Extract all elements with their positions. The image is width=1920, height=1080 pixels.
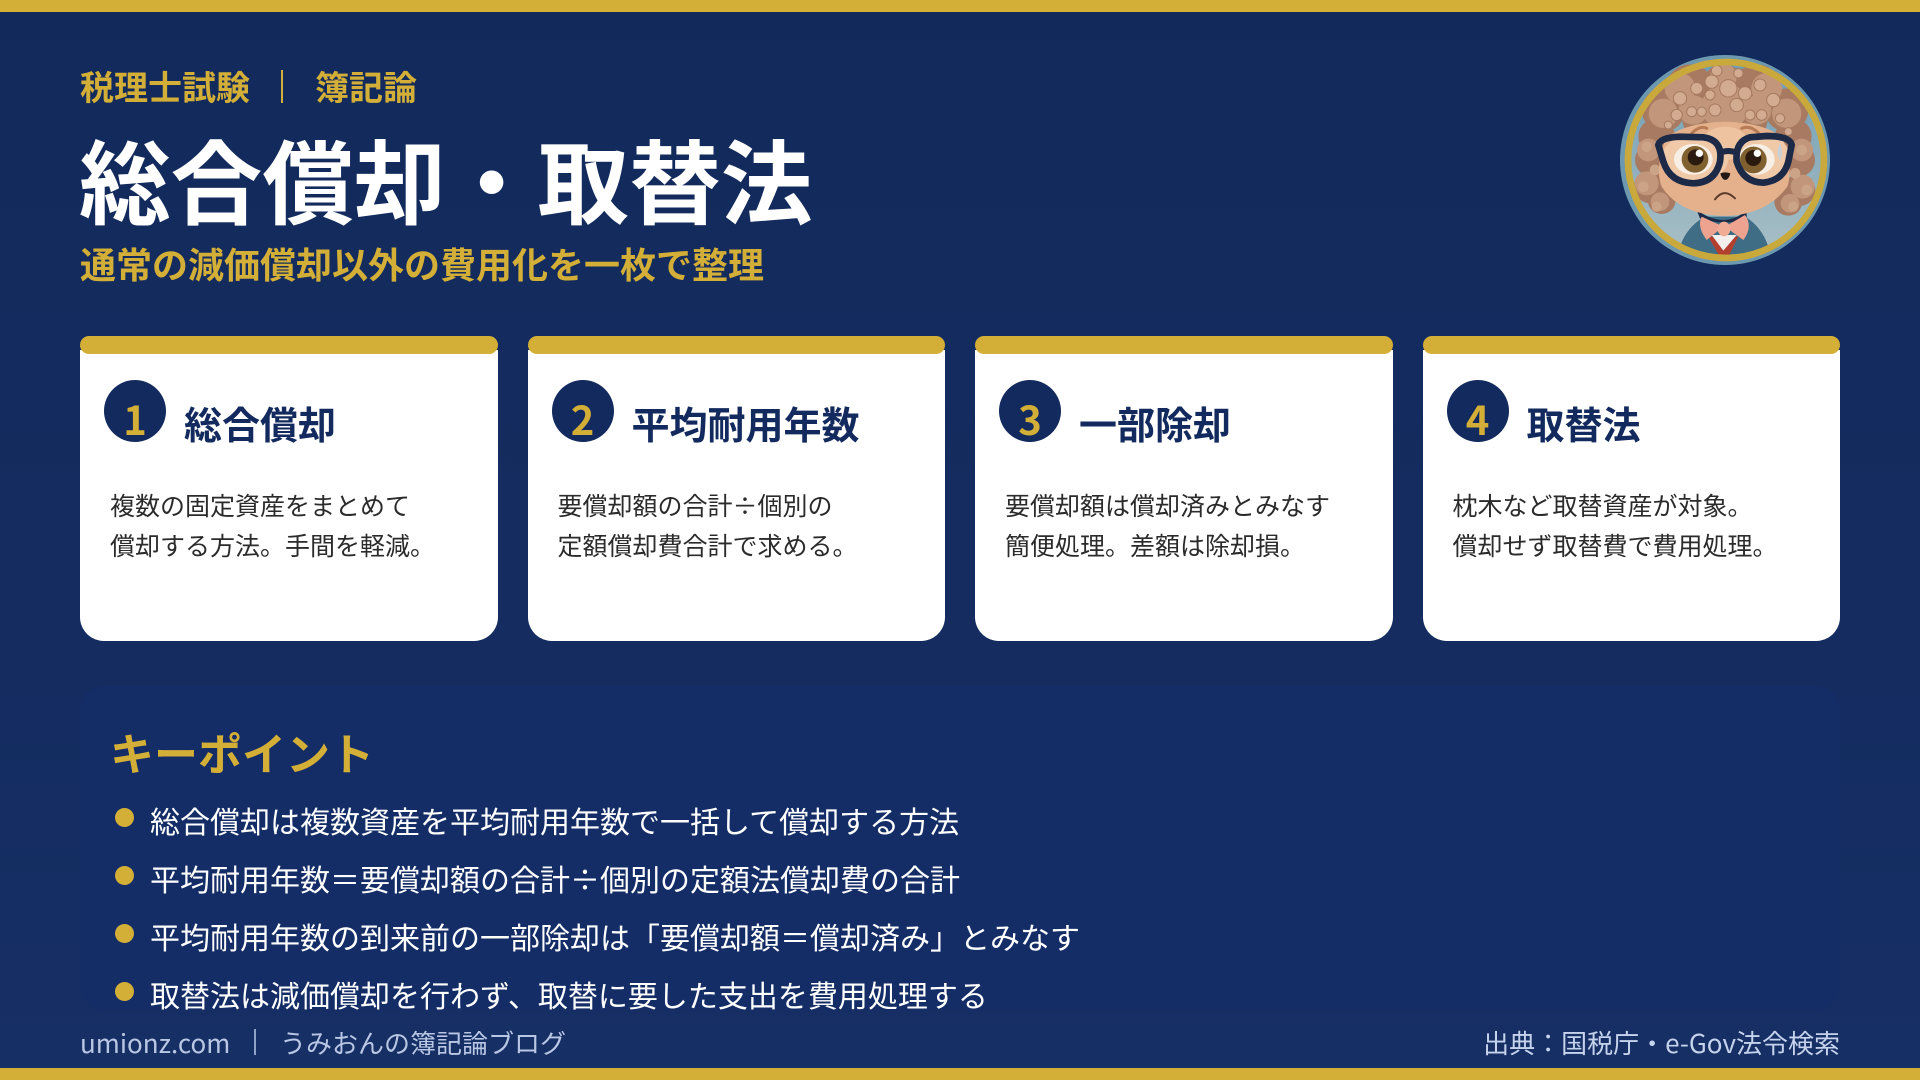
card 3 heading: 一部除却 <box>1079 395 1231 450</box>
footer: source: 出典：国税庁・e-Gov法令検索 <box>1483 1024 1840 1061</box>
footer: site name: うみおんの簿記論ブログ <box>280 1024 566 1061</box>
card 1 description: 償却する方法。手間を軽減。 <box>110 527 435 563</box>
panel: card 2 平均耐用年数 <box>528 336 945 641</box>
card 3 description: 要償却額は償却済みとみなす <box>1005 487 1330 523</box>
card 4 description: 償却せず取替費で費用処理。 <box>1452 527 1778 563</box>
footer: site name: umionz.com <box>80 1024 230 1061</box>
card 3 description: 簡便処理。差額は除却損。 <box>1005 527 1305 563</box>
card 2 number badge <box>552 380 614 442</box>
card 2 description <box>558 487 858 563</box>
card 2 heading: 平均耐用年数 <box>632 395 860 450</box>
bullet 3: 平均耐用年数の到来前の一部除却は「要償却額＝償却済み」とみなす <box>150 914 1080 958</box>
bullet 1: 総合償却は複数資産を平均耐用年数で一括して償却する方法 <box>150 798 959 842</box>
card 1 number badge <box>104 380 166 442</box>
key points heading: キーポイント <box>110 719 374 783</box>
footer: site name <box>80 1024 566 1061</box>
panel: card 4 取替法 <box>1422 336 1840 641</box>
panel: card 1 総合償却 <box>80 336 498 641</box>
card 1 description <box>110 487 435 563</box>
card 4 number badge <box>1446 380 1508 442</box>
eyebrow: exam and subject <box>80 61 417 110</box>
title: 総合償却・取替法 <box>79 112 812 244</box>
panel: card 3 一部除却 <box>975 336 1392 641</box>
top gold bar <box>0 0 1920 12</box>
card 1 heading: 総合償却 <box>184 395 336 450</box>
card 2 description: 要償却額の合計÷個別の <box>558 487 833 523</box>
card 4 heading: 取替法 <box>1526 395 1641 450</box>
card 4 description <box>1452 487 1778 563</box>
bullet 4: 取替法は減価償却を行わず、取替に要した支出を費用処理する <box>150 972 988 1016</box>
card 3 description <box>1005 487 1330 563</box>
card 3 number badge <box>999 380 1061 442</box>
eyebrow: exam and subject: 簿記論 <box>315 61 417 110</box>
bottom gold bar <box>0 1068 1920 1080</box>
subtitle: 通常の減価償却以外の費用化を一枚で整理 <box>80 237 764 289</box>
icon: poodle mascot avatar <box>1620 55 1830 265</box>
eyebrow: exam and subject: 税理士試験 <box>80 61 250 110</box>
card 2 description: 定額償却費合計で求める。 <box>558 527 858 563</box>
card 1 description: 複数の固定資産をまとめて <box>110 487 410 523</box>
bullet 2: 平均耐用年数＝要償却額の合計÷個別の定額法償却費の合計 <box>150 856 960 900</box>
card 4 description: 枕木など取替資産が対象。 <box>1452 487 1753 523</box>
